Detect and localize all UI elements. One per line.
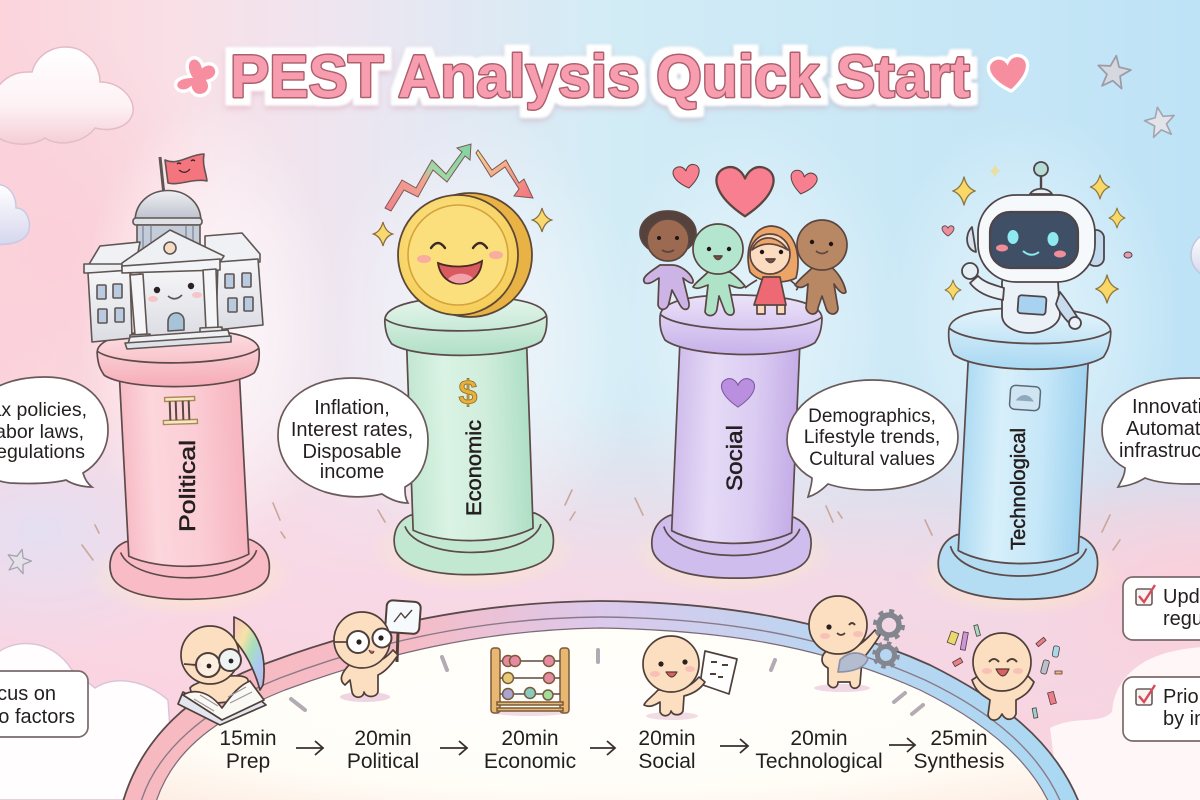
step: technological [755, 727, 883, 773]
icon: pillar columns [163, 396, 197, 425]
step: technological: 20min [790, 727, 848, 750]
speech bubble: Economic: Disposable [303, 441, 401, 463]
pillar label: Technological [1008, 428, 1030, 550]
arrow [889, 738, 915, 752]
speech bubble: Economic: income [320, 461, 384, 483]
step: political [347, 727, 419, 773]
sparkles [945, 164, 1125, 303]
step: social: 20min [638, 727, 696, 750]
step: economic [484, 727, 576, 773]
confetti [947, 625, 1062, 718]
arrow [590, 741, 615, 755]
timeline arch [122, 601, 1080, 800]
pillar: Social [627, 294, 842, 595]
note: update regulations [1123, 577, 1200, 640]
arrow [720, 739, 748, 753]
character: political with sign [334, 600, 421, 702]
person: brown [795, 220, 847, 314]
speech bubble: Social [787, 380, 958, 497]
coin body [398, 193, 532, 317]
person: girl [745, 226, 798, 314]
flag [160, 154, 207, 195]
icon: title heart [989, 56, 1029, 92]
step: synthesis [913, 727, 1005, 773]
step: prep: Prep [226, 750, 270, 773]
step: economic: 20min [501, 727, 559, 750]
pillar label: Social [722, 425, 747, 491]
icon: abacus [491, 648, 569, 716]
step: economic: Economic [484, 750, 576, 773]
pillar: Political [82, 329, 295, 617]
speech bubble: Political [0, 377, 108, 487]
cloud: right small [1191, 232, 1200, 278]
icon: pillar heart [721, 379, 755, 407]
person: green [693, 224, 745, 316]
pillar: Economic [368, 296, 578, 592]
speech bubble: Technological [1102, 378, 1200, 487]
icon: pillar chip [1009, 385, 1041, 411]
star: top right small [1143, 105, 1177, 138]
character: synthesis with confetti [947, 625, 1062, 720]
speech bubble: Social: Cultural values [809, 449, 935, 470]
icon: coin with trend arrows [373, 144, 552, 317]
note: focus on macro factors [0, 671, 88, 737]
step: political: Political [347, 750, 419, 773]
speech bubble: Economic: Interest rates, [291, 419, 413, 441]
cloud: left small [0, 185, 29, 244]
icon: four people and hearts [640, 163, 847, 316]
star: left [5, 546, 34, 575]
character: technological with gears [809, 596, 903, 692]
timeline steps [219, 727, 1005, 773]
character: social with paper [643, 636, 737, 720]
step: political: 20min [354, 727, 412, 750]
cloud: top left [0, 47, 133, 144]
icon: dollar sign: $ [459, 374, 478, 412]
pillar label: Political [175, 440, 200, 532]
speech bubble: Economic [278, 378, 428, 503]
speech bubble: Social: Demographics, [808, 406, 936, 427]
step: social: Social [638, 750, 696, 773]
character: prep with book [178, 617, 266, 725]
icon: government building [84, 154, 263, 349]
pillar: Technological [913, 307, 1123, 617]
gears [874, 611, 903, 667]
speech bubble: Economic: Inflation, [314, 397, 390, 419]
step: prep: 15min [219, 727, 277, 750]
step: social [638, 727, 696, 773]
step: prep [219, 727, 277, 773]
title: PEST Analysis Quick Start [230, 43, 970, 110]
cloud: bottom left [0, 644, 175, 800]
step: synthesis: 25min [930, 727, 988, 750]
icon: title flower [172, 55, 220, 99]
speech bubble: Social: Lifestyle trends, [804, 426, 940, 448]
cloud: bottom right [1050, 647, 1200, 800]
trend arrow up [385, 144, 471, 211]
step: synthesis: Synthesis [913, 750, 1005, 773]
step: technological: Technological [755, 750, 883, 773]
arrow [296, 741, 323, 755]
person: lavender [640, 211, 696, 309]
trend arrow down [476, 150, 533, 198]
icon: robot [942, 162, 1132, 333]
star: top right large [1096, 53, 1133, 90]
pillar label: Economic [463, 420, 486, 516]
note: prioritize by impact [1123, 677, 1200, 741]
arrow [440, 741, 467, 755]
